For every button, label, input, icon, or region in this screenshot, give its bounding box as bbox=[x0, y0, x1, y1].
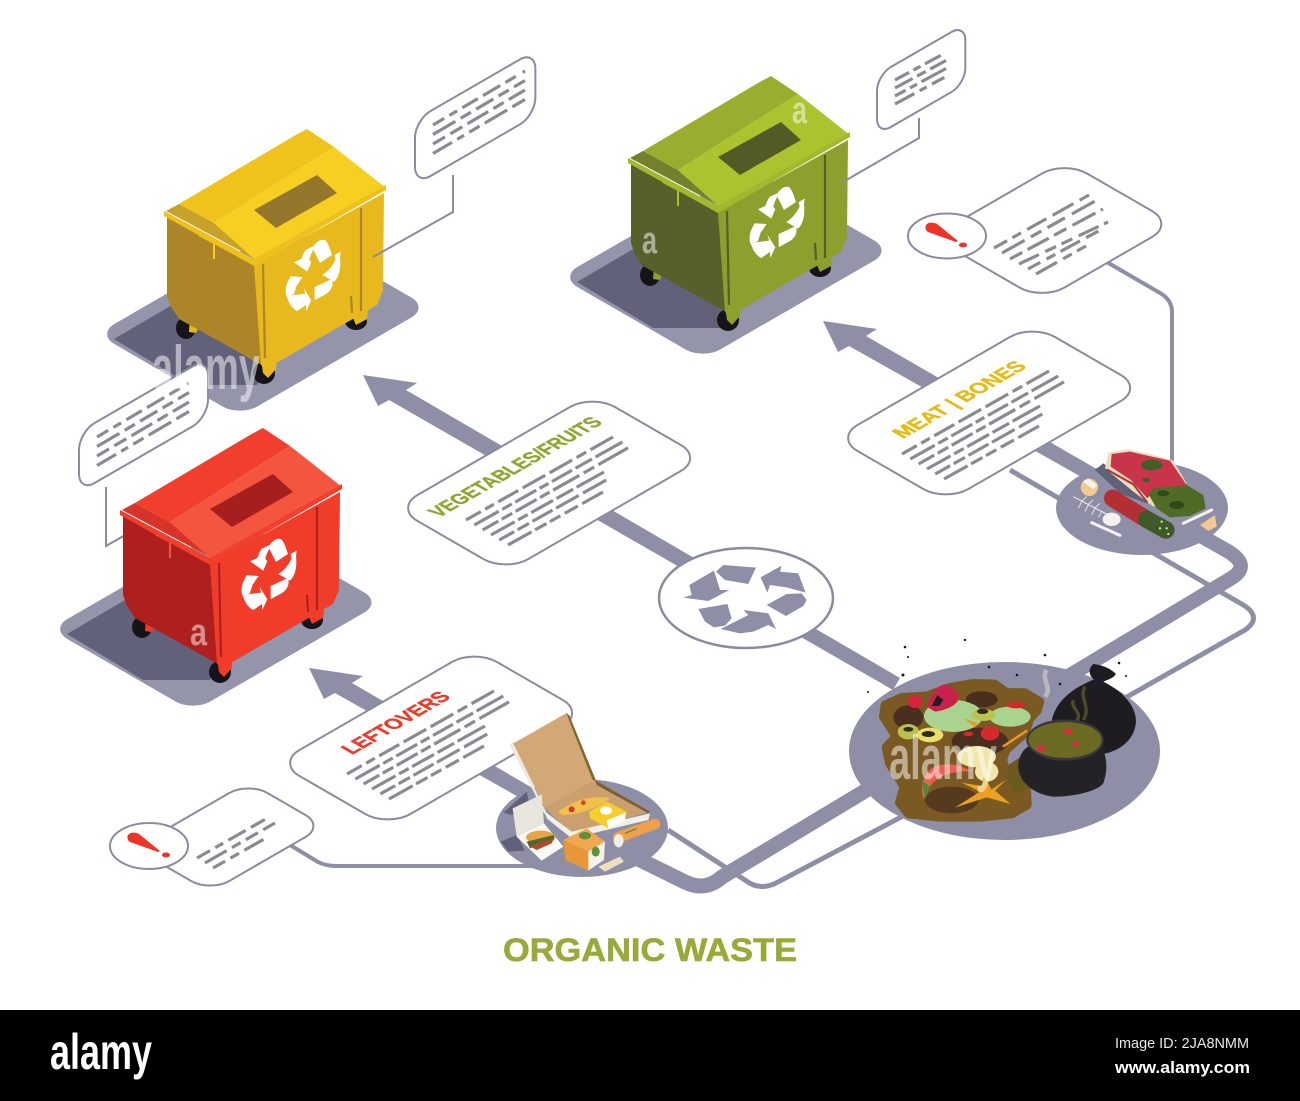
warning icon bbox=[908, 214, 986, 258]
waste pile plate bbox=[849, 639, 1160, 840]
pizza box bbox=[501, 713, 650, 852]
placeholder text bbox=[197, 816, 275, 868]
watermarks: a bbox=[792, 90, 808, 132]
watermarks: a bbox=[642, 220, 658, 262]
arrow: leftovers to red bin bbox=[309, 668, 610, 845]
watermarks bbox=[152, 90, 997, 793]
bubble: leftovers bbox=[277, 649, 585, 827]
placeholder text bbox=[994, 195, 1108, 274]
image id: Image ID: 2JA8NMM bbox=[1115, 1035, 1249, 1052]
watermarks: alamy bbox=[889, 724, 997, 793]
website: www.alamy.com bbox=[1114, 1058, 1250, 1077]
warning bubble: top right bbox=[908, 160, 1174, 300]
connector: warning to meat plate bbox=[1105, 261, 1172, 462]
red bin floor shadow bbox=[50, 520, 382, 712]
green bin floor shadow bbox=[560, 168, 892, 360]
heading: meat bones: MEAT | BONES bbox=[887, 358, 1032, 442]
black trash bag bbox=[1052, 664, 1136, 754]
heading: vegetables fruits: VEGETABLES/FRUITS bbox=[423, 414, 608, 521]
bubble: meat and bones bbox=[835, 324, 1143, 502]
meat plate bbox=[1056, 449, 1228, 555]
moldy cheese block bbox=[563, 828, 624, 872]
spoiled meat bbox=[1095, 449, 1206, 517]
footer logo: alamy bbox=[50, 1024, 152, 1080]
bubble: vegetables and fruits bbox=[395, 394, 703, 572]
warning bubble: bottom left bbox=[110, 782, 325, 892]
recycling disc on floor bbox=[659, 548, 833, 648]
placeholder text bbox=[902, 371, 1066, 479]
note bubble: red bin bbox=[79, 358, 208, 546]
placeholder text bbox=[466, 437, 630, 545]
watermarks: a bbox=[190, 612, 208, 654]
yellow bin bbox=[164, 129, 386, 384]
thin pipe: meat plate to waste pile bbox=[1010, 470, 1254, 698]
baguette bbox=[614, 824, 655, 847]
moldy sausage bbox=[1113, 498, 1169, 535]
yellow bin floor shadow bbox=[97, 225, 429, 416]
green bin bbox=[628, 76, 850, 331]
note bubble: green bin bbox=[843, 24, 965, 182]
title: ORGANIC WASTE bbox=[503, 932, 797, 968]
note bubble: yellow bin bbox=[373, 50, 535, 257]
burger box bbox=[513, 794, 563, 861]
placeholder text bbox=[347, 691, 511, 799]
flow pipes and arrows bbox=[290, 261, 1254, 887]
footer bar bbox=[0, 1010, 1300, 1101]
connector: green note to bin bbox=[843, 118, 919, 182]
bones, fish skeleton and egg shells bbox=[1073, 478, 1217, 535]
warning icon bbox=[110, 823, 188, 869]
placeholder text bbox=[895, 52, 947, 104]
flies and specks bbox=[867, 639, 1127, 693]
thin pipe: leftovers plate to waste pile bbox=[668, 815, 905, 887]
watermarks: alamy bbox=[152, 334, 260, 403]
pipe: meat plate to waste pile bbox=[1062, 490, 1241, 680]
red bin bbox=[120, 428, 342, 683]
cooking pot of soup bbox=[1018, 670, 1106, 797]
heading: leftovers: LEFTOVERS bbox=[336, 688, 456, 758]
organic waste heap bbox=[883, 683, 1040, 817]
connector: yellow note to bin bbox=[373, 175, 453, 257]
arrow: organic waste to yellow bin bbox=[363, 375, 900, 690]
leftovers plate bbox=[496, 713, 668, 877]
arrow: meat and bones to green bin bbox=[823, 321, 1140, 506]
connector: red note to bin bbox=[106, 487, 134, 546]
pipe: leftovers plate to waste pile bbox=[620, 788, 870, 886]
connector: warning to leftovers plate bbox=[290, 845, 545, 866]
